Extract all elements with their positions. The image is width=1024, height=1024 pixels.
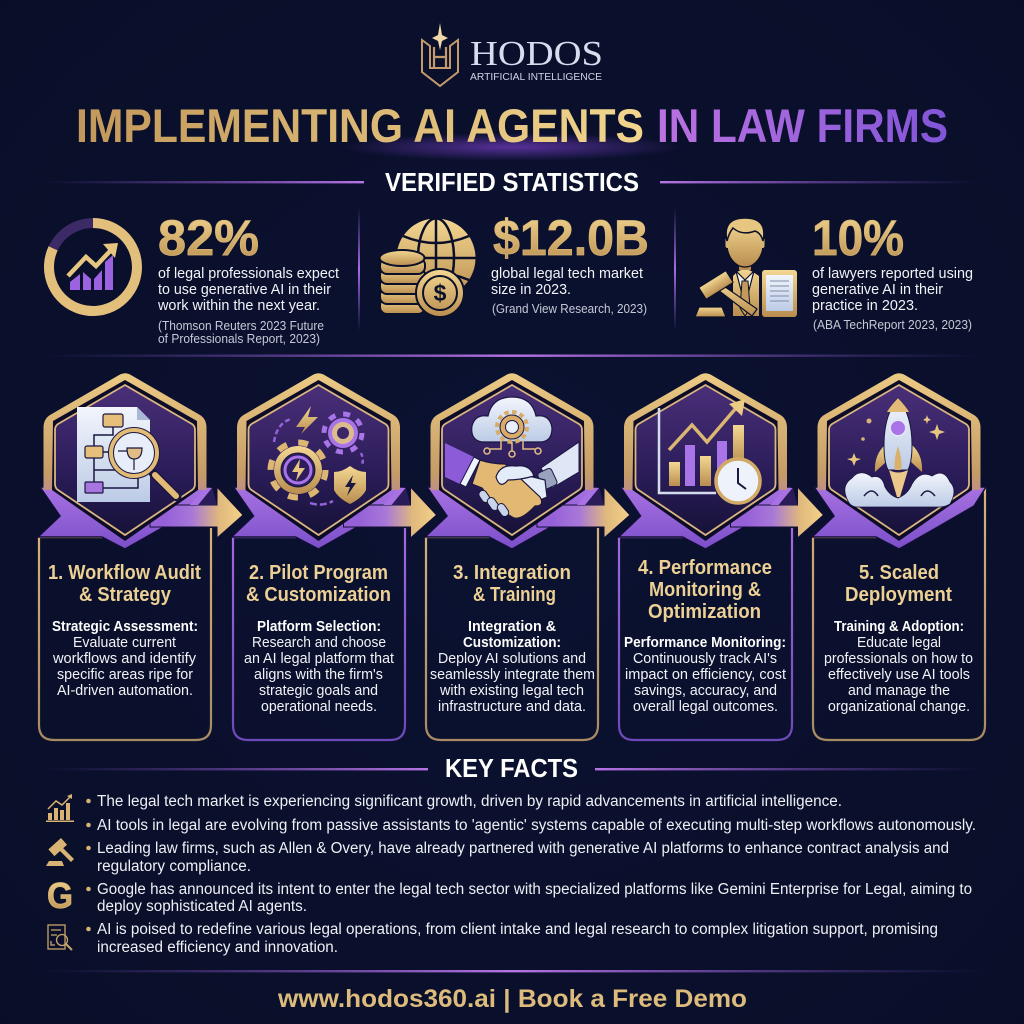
step description: specific areas ripe for [57, 667, 193, 683]
step description [430, 619, 595, 715]
step title: 2. Pilot Program [249, 562, 388, 584]
step description: Research and choose [252, 635, 386, 651]
step description: Platform Selection: [257, 619, 381, 635]
card frame [426, 528, 598, 740]
stat description: work within the next year. [157, 298, 320, 314]
ribbon [425, 470, 599, 549]
icon: document search [48, 925, 72, 950]
ribbon [618, 470, 792, 549]
title: IMPLEMENTING AI AGENTS [76, 99, 644, 152]
step description [824, 619, 973, 715]
step title: Optimization [648, 601, 761, 623]
stat source [158, 319, 324, 346]
card frame [813, 487, 985, 740]
step description: impact on efficiency, cost [625, 667, 786, 683]
step title: Monitoring & [649, 579, 761, 601]
step description: Educate legal [857, 635, 941, 651]
logo wordmark: HODOS [470, 34, 603, 73]
hexagon badge [237, 373, 400, 541]
step description: Customization: [463, 635, 561, 651]
step title [453, 562, 571, 606]
heading: verified statistics: VERIFIED STATISTICS [385, 167, 639, 197]
panel: step 4 performance monitoring [618, 373, 824, 740]
step title: & Customization [246, 584, 391, 606]
stat description: practice in 2023. [812, 298, 918, 314]
step description: Deploy AI solutions and [438, 651, 586, 667]
title glow [342, 133, 682, 161]
step description: and manage the [848, 683, 950, 699]
stat panel: 10% [695, 210, 973, 332]
panel: step 1 workflow audit [38, 373, 243, 740]
step description: Performance Monitoring: [624, 635, 786, 651]
icon: gears, lightning and shield [270, 406, 366, 505]
stat description [157, 266, 339, 314]
arrow [730, 487, 824, 538]
hexagon badge [430, 373, 594, 541]
step description: with existing legal tech [439, 683, 584, 699]
step description: infrastructure and data. [438, 699, 586, 715]
icon: gavel [46, 838, 74, 866]
title: IN LAW FIRMS [657, 99, 948, 152]
icon: cloud and robot handshake [445, 397, 579, 518]
step description [52, 619, 198, 699]
step description: Integration & [468, 619, 557, 635]
ribbon [38, 470, 212, 549]
stat description: of lawyers reported using [812, 266, 973, 282]
bullet list: The legal tech market is experiencing significant growth, driven by rapid advancements in artificial intelligence. [97, 793, 842, 810]
icon: lawyer with gavel and tablet [695, 218, 797, 317]
step title [246, 562, 391, 606]
panel: step 3 integration [425, 373, 630, 740]
stat source: (Thomson Reuters 2023 Future [158, 319, 324, 333]
step title: & Strategy [79, 584, 172, 606]
arrow [537, 487, 630, 538]
step description: strategic goals and [259, 683, 378, 699]
step title: 5. Scaled [859, 562, 939, 584]
step title: Deployment [845, 584, 952, 606]
stat description: global legal tech market [491, 266, 643, 282]
stat description: size in 2023. [491, 282, 571, 298]
bullet list: AI tools in legal are evolving from passive assistants to 'agentic' systems capable of executing multi-step workflows autonomously. [97, 817, 976, 834]
stat source: (ABA TechReport 2023, 2023) [813, 318, 972, 332]
panel: step 5 scaled deployment [812, 373, 986, 740]
icon: document flowchart with magnifier [77, 407, 177, 502]
icon: shield star [422, 23, 458, 86]
stat description: of legal professionals expect [158, 266, 339, 282]
icon: letter G: G [47, 875, 73, 916]
step description: Strategic Assessment: [52, 619, 198, 635]
stat source: (Grand View Research, 2023) [492, 302, 647, 316]
heading: key facts: KEY FACTS [445, 753, 578, 783]
ribbon [812, 470, 986, 549]
step description: Continuously track AI's [633, 651, 777, 667]
bullet list: AI is poised to redefine various legal operations, from client intake and legal research to complex litigation support, promising [97, 921, 938, 938]
step description: overall legal outcomes. [633, 699, 778, 715]
bullet list: Google has announced its intent to enter the legal tech sector with specialized platforms like Gemini Enterprise for Legal, aiming to [97, 881, 972, 898]
step description: organizational change. [828, 699, 970, 715]
step title: 1. Workflow Audit [48, 562, 201, 584]
hexagon badge [624, 373, 787, 541]
icon: donut chart with growth arrow [49, 223, 137, 311]
panel: step 2 pilot program [232, 373, 436, 740]
step title: 4. Performance [638, 557, 772, 579]
step title: & Training [473, 584, 556, 606]
stat panel: $12.0B [380, 210, 649, 317]
stat description: generative AI in their [812, 282, 943, 298]
stat value: 10% [812, 210, 904, 266]
ribbon [232, 470, 406, 549]
stat panel: 82% [49, 210, 339, 346]
stat description [491, 266, 643, 298]
icon: globe, coins and dollar: $ [434, 280, 447, 306]
bullet list: Leading law firms, such as Allen & Overy, have already partnered with generative AI platforms to enhance contract analysis and [97, 840, 949, 857]
stat source: of Professionals Report, 2023) [158, 332, 320, 346]
bullet list: regulatory compliance. [97, 858, 251, 875]
bullet list: deploy sophisticated AI agents. [97, 898, 307, 915]
stat value: $12.0B [493, 210, 649, 266]
step description: savings, accuracy, and [634, 683, 777, 699]
icon: rocket launching [845, 398, 954, 507]
footer call to action: www.hodos360.ai | Book a Free Demo [277, 985, 747, 1013]
step title [48, 562, 201, 606]
step description: professionals on how to [824, 651, 973, 667]
step description: operational needs. [261, 699, 377, 715]
icon: globe, coins and dollar [380, 218, 476, 317]
stat description [812, 266, 973, 314]
stat value: 82% [158, 210, 259, 266]
card frame [233, 528, 405, 740]
step description: an AI legal platform that [244, 651, 394, 667]
step description: Evaluate current [73, 635, 176, 651]
step title [638, 557, 772, 623]
stat description: to use generative AI in their [158, 282, 331, 298]
bullet list [86, 793, 976, 956]
step description [244, 619, 394, 715]
step description: aligns with the firm's [254, 667, 383, 683]
step description: seamlessly integrate them [430, 667, 595, 683]
hexagon badge [818, 373, 980, 541]
bullet list: increased efficiency and innovation. [97, 939, 338, 956]
step title [845, 562, 952, 606]
step description: workflows and identify [52, 651, 197, 667]
step title: 3. Integration [453, 562, 571, 584]
hexagon badge [44, 373, 206, 541]
icon: market chart [46, 794, 74, 822]
step description: effectively use AI tools [828, 667, 970, 683]
logo [422, 23, 603, 86]
panel: key facts list [46, 793, 976, 956]
card frame [619, 528, 792, 740]
step description: AI-driven automation. [57, 683, 193, 699]
step description: Training & Adoption: [834, 619, 964, 635]
step description [624, 635, 786, 715]
card frame [39, 528, 211, 740]
logo tagline: ARTIFICIAL INTELLIGENCE [470, 72, 602, 83]
arrow [344, 487, 436, 538]
icon: growth chart with clock [659, 399, 760, 503]
arrow [150, 487, 243, 538]
